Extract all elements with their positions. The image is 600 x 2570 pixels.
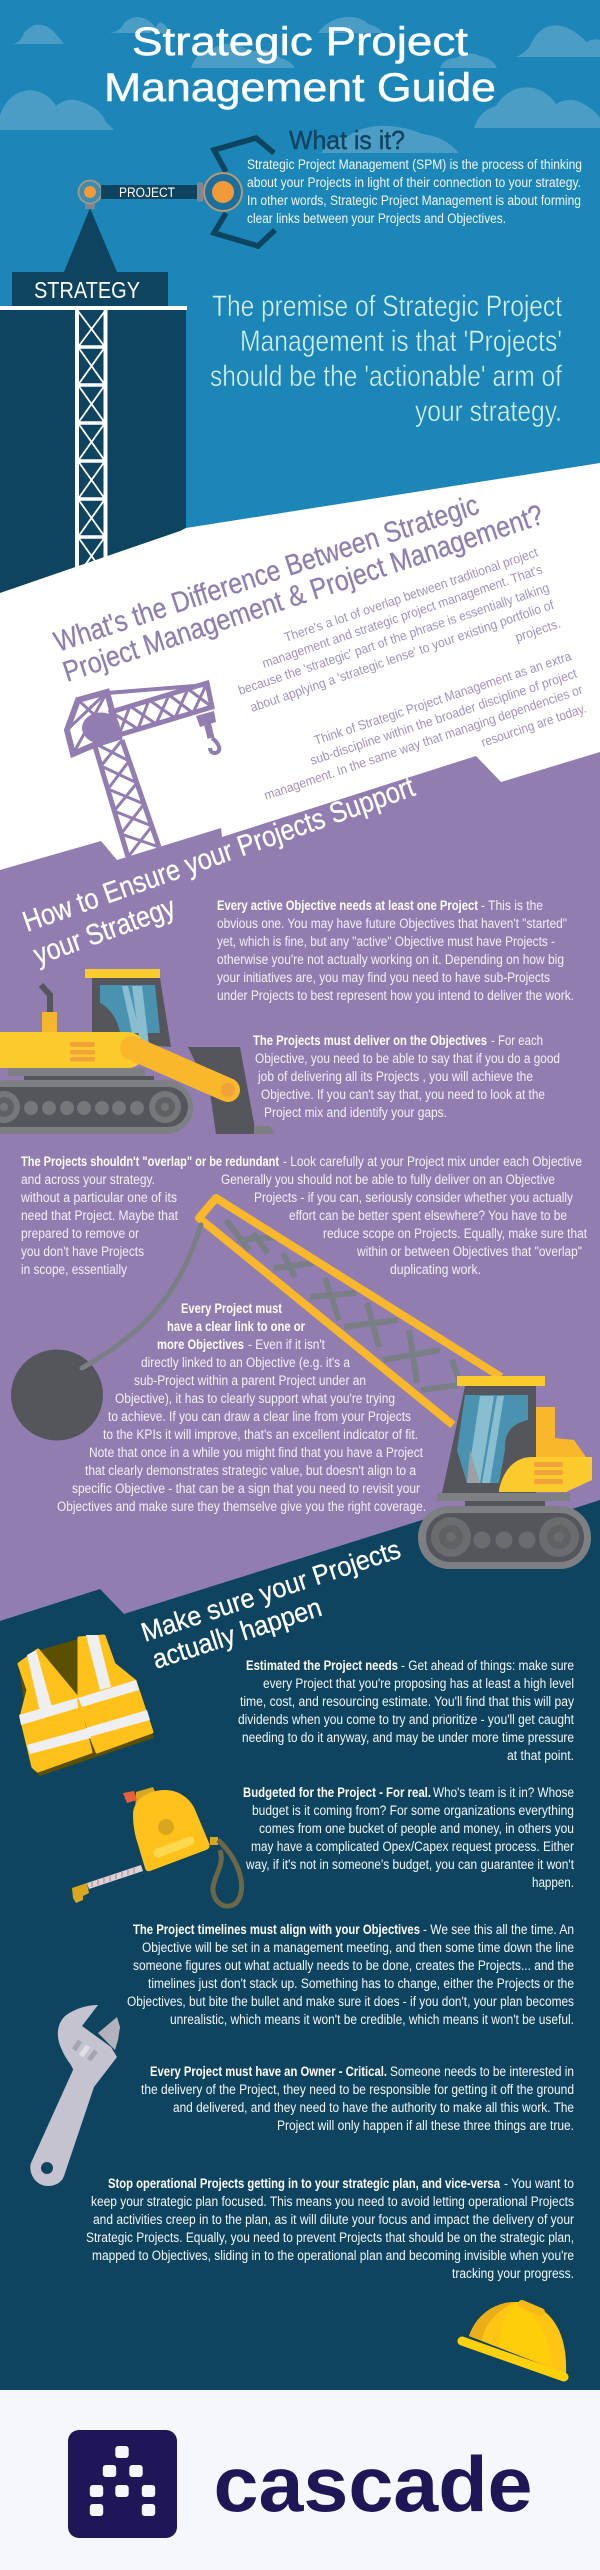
text block: estimated project needs: time, cost, and resourcing estimate. You'll find that this will pay [240,1694,574,1709]
text block: projects must deliver: Objective. If you can't say that, you need to look at the [261,1087,545,1102]
text block: timelines [127,1922,574,2027]
text block: budgeted: comes from one bucket of people and money, in others you [259,1821,574,1836]
icon: hard hat [462,2302,566,2377]
text block: stop operational projects: - You want to [504,2176,574,2191]
text block: projects must deliver: Objective, you need to be able to say that if you do a good [255,1051,560,1066]
crane lattice [226,1220,459,1390]
text block: owner: Someone needs to be interested in [390,2064,574,2079]
text block: projects shouldn't overlap: need that Project. Maybe that [21,1208,178,1223]
panel: what is it: What is it? [289,125,405,155]
text block: every project must link: that clearly demonstrates strategic value, but doesn't align to a [85,1463,416,1478]
panel: footer background [0,2390,600,2570]
text block: estimated project needs: - Get ahead of things: make sure [401,1658,574,1673]
text block: projects shouldn't overlap [20,1154,587,1277]
text block: estimated project needs: Estimated the Project needs [246,1658,398,1673]
text block: every project must link: - Even if it isn't [248,1337,325,1352]
text block: projects shouldn't overlap: The Projects shouldn't "overlap" or be redundant [21,1154,279,1169]
text block: every active objective: your initiatives are, you may find you need to have sub-Projects [217,970,550,985]
text block: every active objective: obvious one. You may have future Objectives that haven't "started" [217,916,567,931]
text block: every project must link: more Objectives [157,1337,244,1352]
text block: difference paragraph one: management and strategic project management. That's [260,561,545,671]
icon: tape measure [72,1787,242,1906]
text block: projects must deliver: job of delivering all its Projects , you will achieve the [257,1069,533,1084]
heading: how to ensure: How to Ensure your Projects Support [19,771,419,939]
text block: owner [141,2064,574,2133]
heading: difference: What's the Difference Between Strategic [50,489,483,659]
text block: every project must link: specific Objective - that can be a sign that you need to revisit your [72,1481,420,1496]
text block: owner: Project will only happen if all these three things are true. [277,2118,574,2133]
text block: stop operational projects: tracking your progress. [452,2266,574,2281]
title: Management Guide [104,66,496,110]
text block: budgeted: budget is it coming from? For some organizations everything [252,1803,574,1818]
strategy box: STRATEGY [34,277,140,303]
text block: every project must link: Every Project must [181,1301,282,1316]
panel: what is it [247,125,582,226]
text block: difference paragraph one: about applying a 'strategic lense' to your existing portfolio of [248,597,556,715]
text block: estimated project needs [238,1658,574,1763]
callout: premise statement [210,290,563,428]
text block: projects must deliver [253,1033,560,1120]
text block: budgeted [243,1785,574,1890]
text block: difference paragraph two: resourcing are today. [479,701,588,750]
small joint [78,180,102,204]
text block: every project must link: sub-Project within a parent Project under an [134,1373,366,1388]
text block: every project must link: directly linked to an Objective (e.g. it's a [141,1355,350,1370]
wrecking ball [11,1350,103,1440]
text block: every project must link [57,1301,426,1514]
project arm [101,182,203,202]
text block: difference paragraph one: because the 'strategic' part of the phrase is essentially talking [236,580,551,698]
strategy box [12,272,168,306]
panel: what is it: clear links between your Projects and Objectives. [247,211,506,226]
text block: estimated project needs: at that point. [507,1748,574,1763]
text block: difference paragraph one: projects. [513,616,563,645]
text block: every project must link: Note that once in a while you might find that you have a Project [89,1445,423,1460]
text block: every project must link: Objective), it has to clearly support what you're trying [115,1391,395,1406]
logo wordmark: cascade [214,2440,532,2528]
text block: difference paragraph one: There's a lot of overlap between traditional project [282,544,540,645]
icon: wrecking crane [11,1198,501,1440]
heading: make sure projects happen: actually happen [149,1592,325,1675]
crane rope [82,1225,201,1368]
callout: premise statement: your strategy. [415,395,562,428]
text block: budgeted: Who's team is it in? Whose [433,1785,574,1800]
text block: every active objective: otherwise you're not actually working on it. Depending on how big [217,952,564,967]
icon: wrench [30,2005,120,2186]
text block: difference paragraph two: Think of Strategic Project Management as an extra [312,648,574,748]
large joint [204,173,242,211]
text block: every active objective: - This is the [481,898,543,913]
title: Strategic Project [132,20,468,64]
text block: every active objective: Every active Objective needs at least one Project [217,898,478,913]
text block: projects shouldn't overlap: effort can be better spent elsewhere? You have to be [289,1208,567,1223]
text block: stop operational projects: Stop operational Projects getting in to your strategic plan, and vice-versa [108,2176,500,2191]
text block: projects shouldn't overlap: you don't have Projects [21,1244,144,1259]
text block: projects must deliver: The Projects must deliver on the Objectives [253,1033,487,1048]
project arm: PROJECT [119,185,175,200]
text block: budgeted: happen. [532,1875,574,1890]
panel: sky header [0,0,600,620]
text block: difference paragraph two: sub-discipline within the broader discipline of project [308,666,579,768]
logo: cascade [68,2430,532,2538]
text block: every project must link: to achieve. If you can draw a clear line from your Projects [108,1409,411,1424]
claw [214,138,275,246]
lattice tower [77,310,106,600]
panel: happen section background [0,1500,600,2390]
text block: every project must link: to the KPIs it will improve, that's an excellent indicator of fit. [103,1427,418,1442]
text block: projects shouldn't overlap: duplicating work. [390,1262,481,1277]
text block: projects shouldn't overlap: in scope, essentially [21,1262,127,1277]
text block: timelines: The Project timelines must align with your Objectives [133,1922,420,1937]
text block: projects must deliver: - For each [491,1033,543,1048]
text block: every project must link: Objectives and make sure they themselve give you the right coverage. [57,1499,426,1514]
text block: projects shouldn't overlap: Generally you should not be able to fully deliver on an Objective [221,1172,555,1187]
text block: timelines: - We see this all the time. An [423,1922,574,1937]
icon: bulldozer [0,969,275,1134]
icon: strategy tower with project arm [0,138,275,610]
text block: every active objective [217,898,574,1003]
text block: projects must deliver: Project mix and identify your gaps. [264,1105,447,1120]
panel: support section background [0,752,600,1630]
panel: difference section background [0,463,600,890]
text block: owner: Every Project must have an Owner - Critical. [150,2064,387,2079]
title [104,20,496,110]
text block: projects shouldn't overlap: prepared to remove or [21,1226,139,1241]
text block: stop operational projects [86,2176,574,2281]
icon: safety vest [19,1635,154,1776]
text block: every project must link: have a clear link to one or [167,1319,306,1334]
text block: projects shouldn't overlap: and across your strategy. [21,1172,155,1187]
icon: tractor cabin [418,1376,592,1569]
crane boom [199,1198,501,1425]
text block: every active objective: yet, which is fine, but any "active" Objective must have Projects - [217,934,555,949]
logo mark [68,2430,177,2538]
heading: make sure projects happen: Make sure your Projects [137,1534,404,1648]
text block: projects shouldn't overlap: without a particular one of its [20,1190,177,1205]
icon: purple tower crane [67,683,219,857]
clouds [0,17,600,153]
heading: how to ensure [19,771,419,972]
text block: budgeted: Budgeted for the Project - For real. [243,1785,431,1800]
heading: how to ensure: your Strategy [30,891,180,972]
